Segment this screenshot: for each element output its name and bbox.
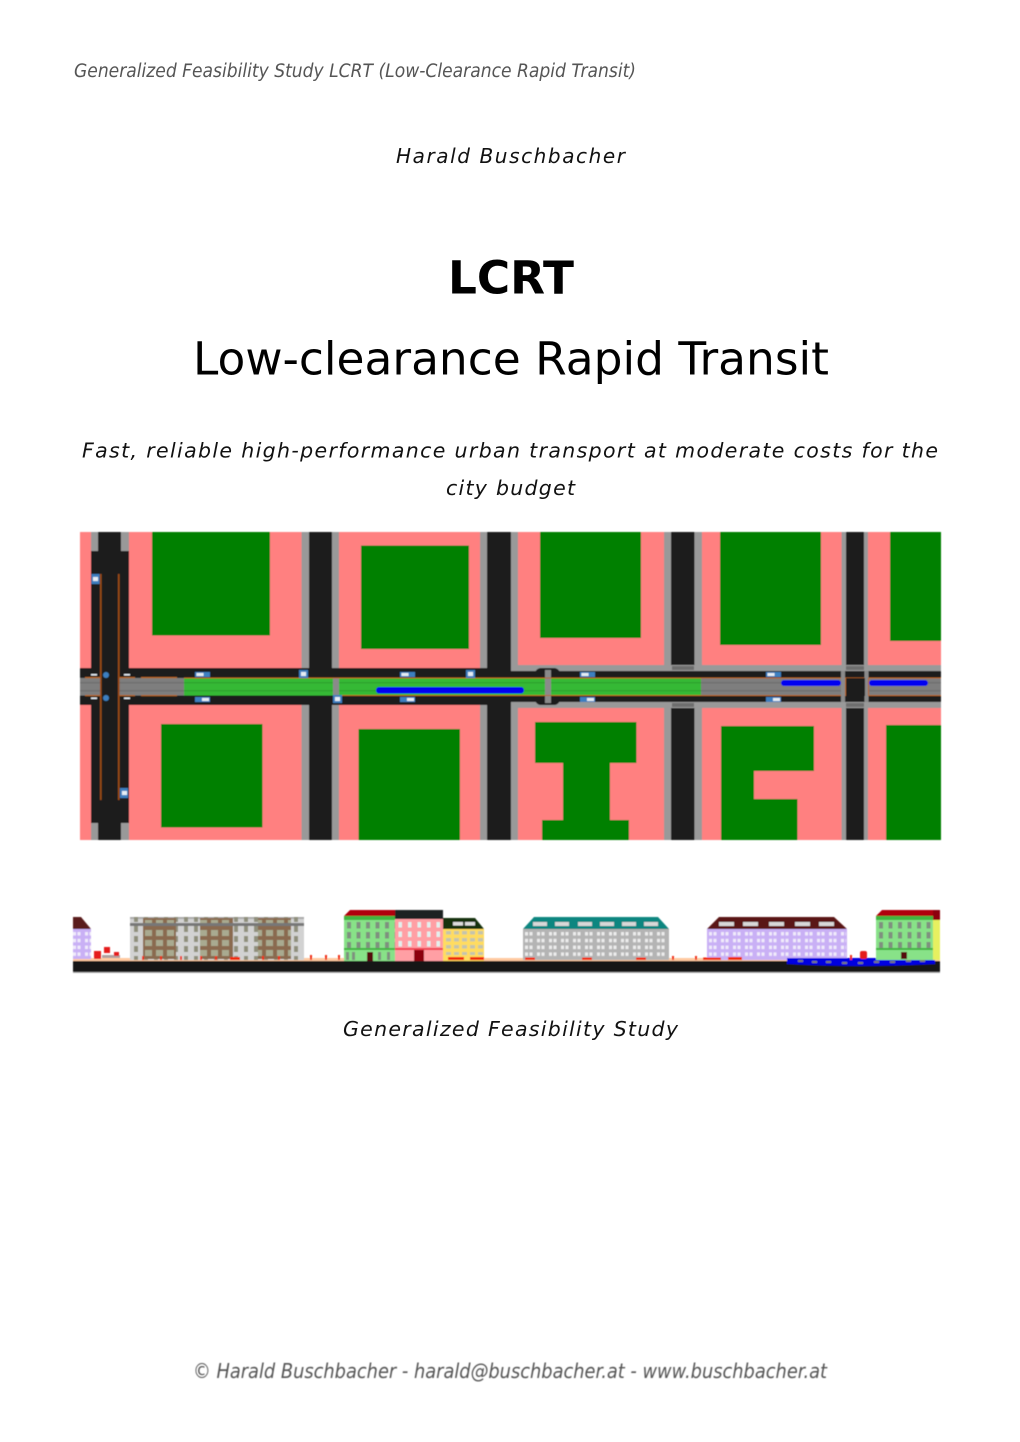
- sidewalks east of junction: [511, 665, 941, 708]
- building: pink: [395, 910, 443, 961]
- building: teal roof grey: [523, 917, 669, 960]
- plan view map: [80, 532, 941, 840]
- document subtitle: Generalized Feasibility Study: [343, 1017, 679, 1041]
- main street: [80, 668, 511, 705]
- vertical streets: [91, 532, 868, 840]
- title: LCRT: [448, 252, 574, 304]
- green building plots, top: [152, 532, 941, 649]
- tagline: Fast, reliable high-performance urban transport at moderate costs for the: [82, 438, 938, 462]
- train in cutting: [787, 958, 935, 966]
- building: green right: [876, 910, 940, 960]
- building: purple left: [73, 917, 91, 959]
- subtitle: Low-clearance Rapid Transit: [193, 332, 829, 386]
- tagline: [82, 438, 938, 500]
- trains: [376, 680, 928, 694]
- author: Harald Buschbacher: [396, 144, 627, 168]
- street elevation view: [73, 910, 940, 973]
- green building plots, bottom: [161, 722, 941, 840]
- cross junction: [100, 574, 869, 800]
- icon: vehicle: [94, 947, 120, 959]
- building: green: [344, 910, 395, 961]
- running header: Generalized Feasibility Study LCRT (Low-Clearance Rapid Transit): [74, 61, 636, 82]
- buses and stops: [91, 574, 781, 798]
- building: maroon roof purple: [707, 917, 847, 960]
- trackway: [80, 670, 941, 703]
- pavement strip: [73, 958, 940, 961]
- building: yellow: [443, 918, 484, 961]
- icon: red vehicle: [860, 951, 867, 959]
- tagline: city budget: [446, 476, 576, 500]
- building: grey brown: [130, 917, 304, 960]
- footer: © Harald Buschbacher - harald@buschbacher.at - www.buschbacher.at: [193, 1359, 828, 1383]
- street details: [142, 955, 852, 960]
- road: [73, 961, 940, 972]
